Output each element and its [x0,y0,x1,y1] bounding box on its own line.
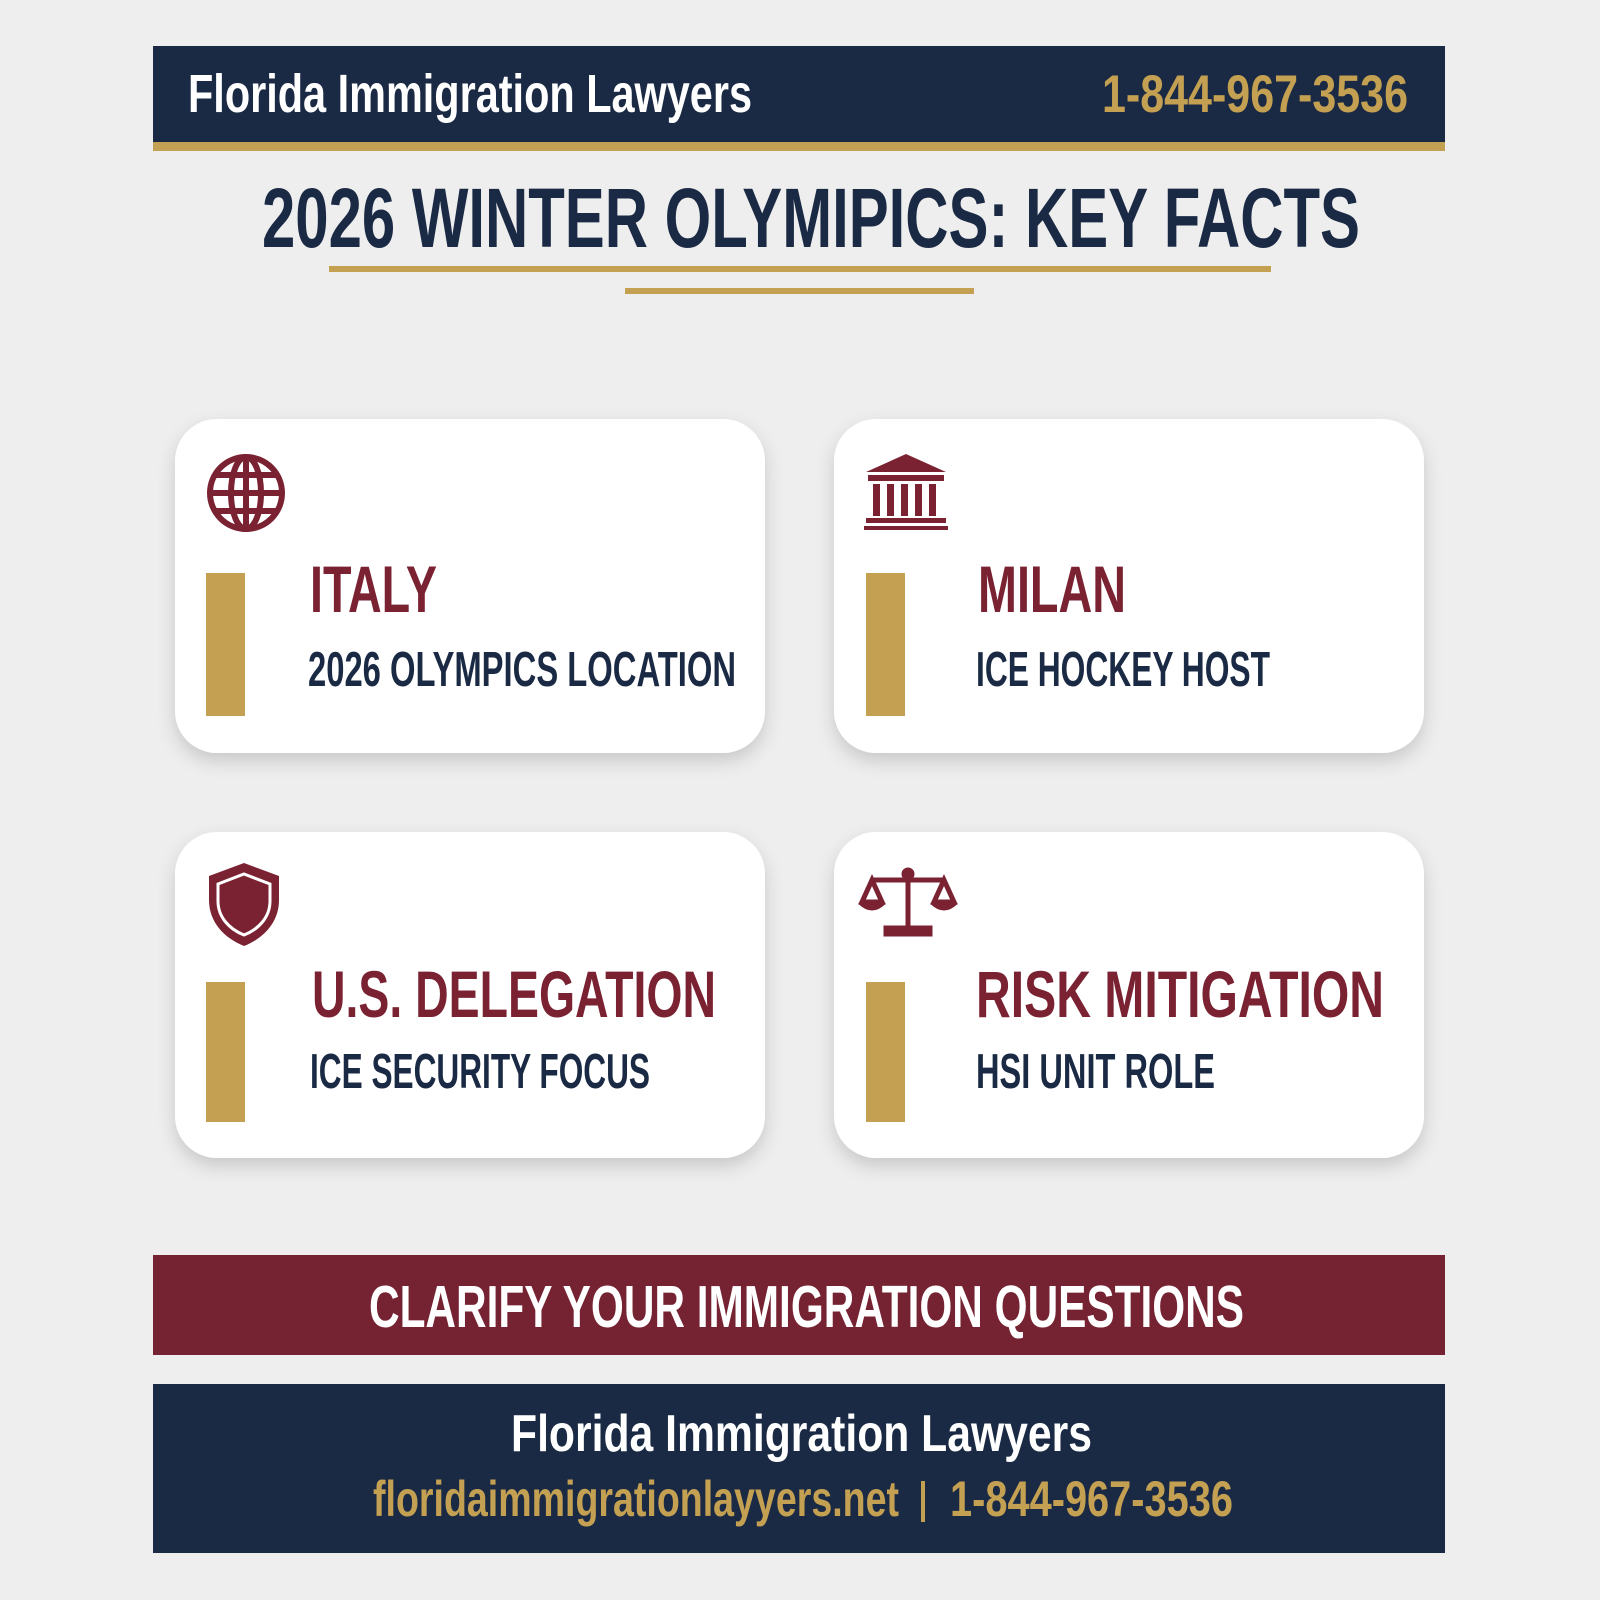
footer: 1-844-967-3536 [950,1471,1233,1527]
header bar [153,46,1445,151]
panel: Italy: ITALY [310,552,437,626]
icon: shield [209,863,279,946]
panel: U.S. Delegation: ICE SECURITY FOCUS [310,1045,650,1099]
icon: globe [210,457,282,529]
header phone: 1-844-967-3536 [1102,65,1408,124]
footer [153,1384,1445,1553]
header firm name: Florida Immigration Lawyers [188,64,752,124]
title [262,171,1360,294]
panel: U.S. Delegation: U.S. DELEGATION [312,957,716,1031]
panel: Milan: ICE HOCKEY HOST [976,643,1270,697]
panel: Risk Mitigation: HSI UNIT ROLE [976,1045,1215,1099]
footer: Florida Immigration Lawyers [511,1405,1092,1463]
panel: Italy [175,419,765,753]
panel: Risk Mitigation: RISK MITIGATION [976,957,1384,1031]
panel: Milan: MILAN [978,552,1126,626]
call to action banner [153,1255,1445,1355]
icon: building [864,454,948,530]
panel: Milan [834,419,1424,753]
panel: U.S. Delegation [175,832,765,1158]
icon: scales [860,870,956,934]
call to action banner: CLARIFY YOUR IMMIGRATION QUESTIONS [369,1274,1244,1340]
footer: floridaimmigrationlayyers.net [373,1471,899,1527]
panel: Italy: 2026 OLYMPICS LOCATION [308,643,736,697]
panel: Risk Mitigation [834,832,1424,1158]
